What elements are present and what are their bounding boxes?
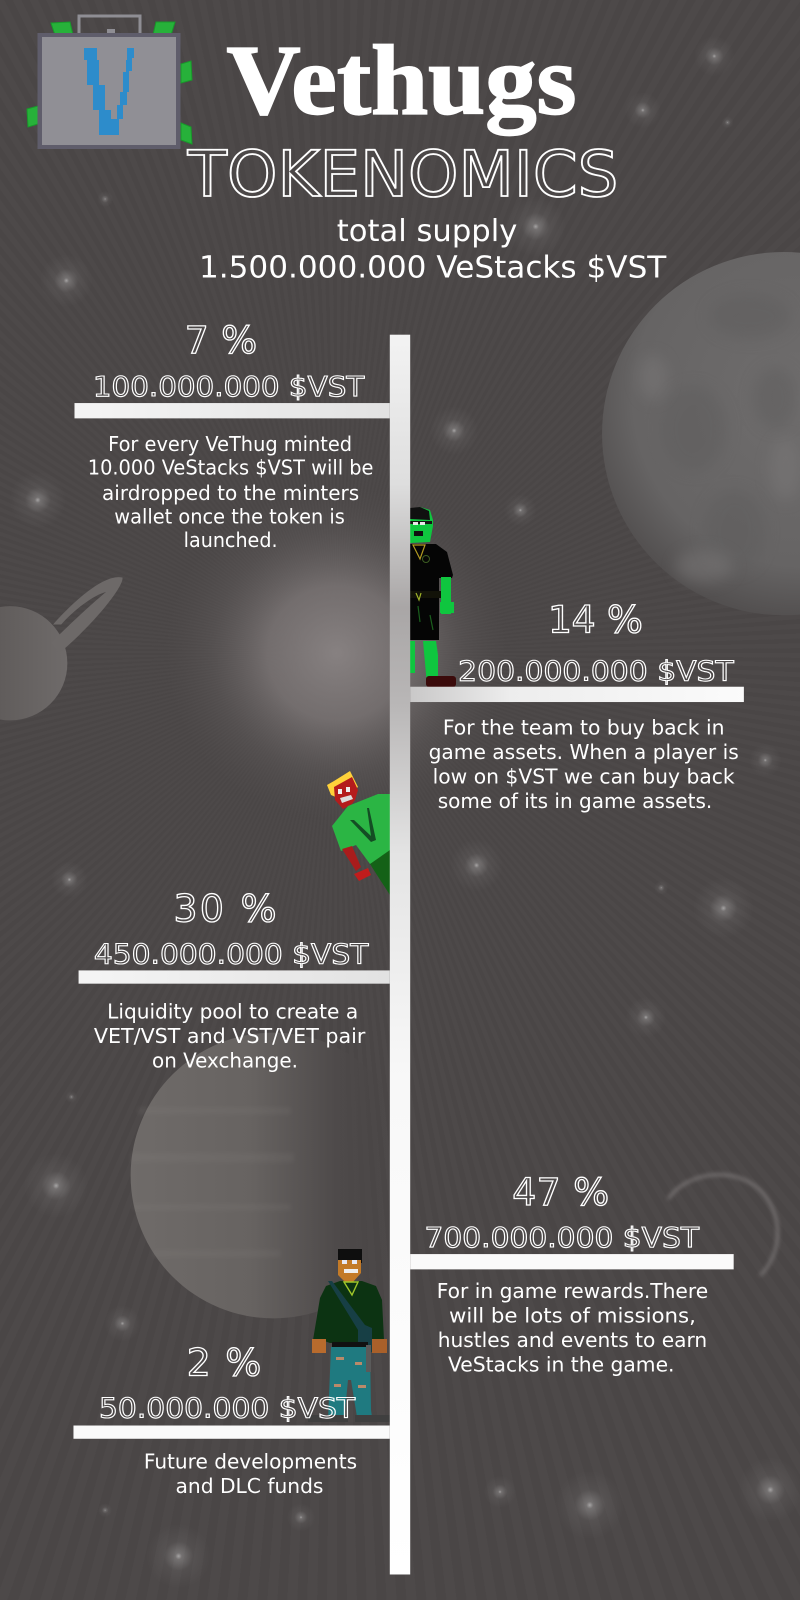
allocation: 2 percent: and DLC funds: [176, 1474, 323, 1498]
allocation: 47 percent: VeStacks in the game.: [448, 1352, 674, 1376]
allocation: 14 percent: game assets. When a player is: [429, 740, 739, 764]
allocation: 30 percent: 30 %: [173, 886, 277, 930]
allocation: 14 percent: For the team to buy back in: [443, 716, 724, 740]
allocation: 2 percent: Future developments: [144, 1449, 357, 1473]
central light burst: [163, 485, 510, 821]
allocation: 30 percent: 450.000.000 $VST: [94, 938, 369, 970]
allocation: 7 percent: 10.000 VeStacks $VST will be: [88, 455, 373, 479]
allocation: 14 percent: 14 %: [548, 598, 643, 642]
allocation: 7 percent: 7 %: [185, 318, 257, 362]
allocation: 7 percent: airdropped to the minters: [102, 481, 359, 505]
allocation: 47 percent: hustles and events to earn: [438, 1328, 707, 1352]
total supply heading: [199, 214, 667, 286]
allocation: 7 percent: launched.: [184, 528, 278, 552]
allocation: 7 percent: wallet once the token is: [114, 504, 345, 528]
branch: 7 percent: [74, 403, 390, 418]
allocation: 2 percent: [99, 1341, 357, 1498]
allocation: 14 percent: low on $VST we can buy back: [433, 765, 735, 789]
planet: moon: [602, 252, 800, 615]
character: red thug: [327, 771, 390, 895]
allocation: 30 percent: on Vexchange.: [152, 1048, 298, 1072]
allocation: 7 percent: 100.000.000 $VST: [93, 371, 364, 403]
total supply heading: total supply: [337, 214, 517, 249]
branch: 47 percent: [410, 1254, 734, 1269]
total supply heading: 1.500.000.000 VeStacks $VST: [199, 251, 667, 286]
allocation: 14 percent: some of its in game assets.: [438, 789, 712, 813]
branch: 2 percent: [73, 1426, 390, 1439]
allocation: 7 percent: [88, 318, 373, 552]
branch: 30 percent: [79, 970, 390, 984]
ring-shaped eclipse: [668, 1175, 778, 1276]
allocation: 47 percent: 700.000.000 $VST: [424, 1222, 699, 1254]
allocation: 7 percent: For every VeThug minted: [108, 432, 352, 456]
allocation: 30 percent: VET/VST and VST/VET pair: [94, 1024, 366, 1048]
character: green thug: [410, 507, 456, 687]
allocation: 14 percent: 200.000.000 $VST: [458, 656, 734, 688]
branch: 14 percent: [410, 687, 744, 702]
planet: saturn: [0, 577, 123, 720]
allocation: 47 percent: For in game rewards.There: [437, 1279, 708, 1303]
allocation: 47 percent: [424, 1170, 708, 1376]
allocation: 30 percent: Liquidity pool to create a: [107, 999, 358, 1023]
icon: briefcase with V logo: [27, 16, 192, 149]
subtitle: tokenomics: TOKENOMICS: [187, 137, 618, 211]
vertical timeline bar: [390, 335, 410, 1574]
allocation: 2 percent: 2 %: [187, 1341, 261, 1385]
allocation: 30 percent: [94, 886, 369, 1072]
allocation: 47 percent: will be lots of missions,: [449, 1303, 696, 1327]
allocation: 14 percent: [429, 598, 739, 813]
allocation: 2 percent: 50.000.000 $VST: [99, 1392, 355, 1424]
planet: jupiter: [131, 1033, 416, 1318]
character: brown-skinned thug: [308, 1249, 395, 1422]
allocation: 47 percent: 47 %: [512, 1170, 609, 1214]
title: Vethugs: [227, 24, 577, 135]
